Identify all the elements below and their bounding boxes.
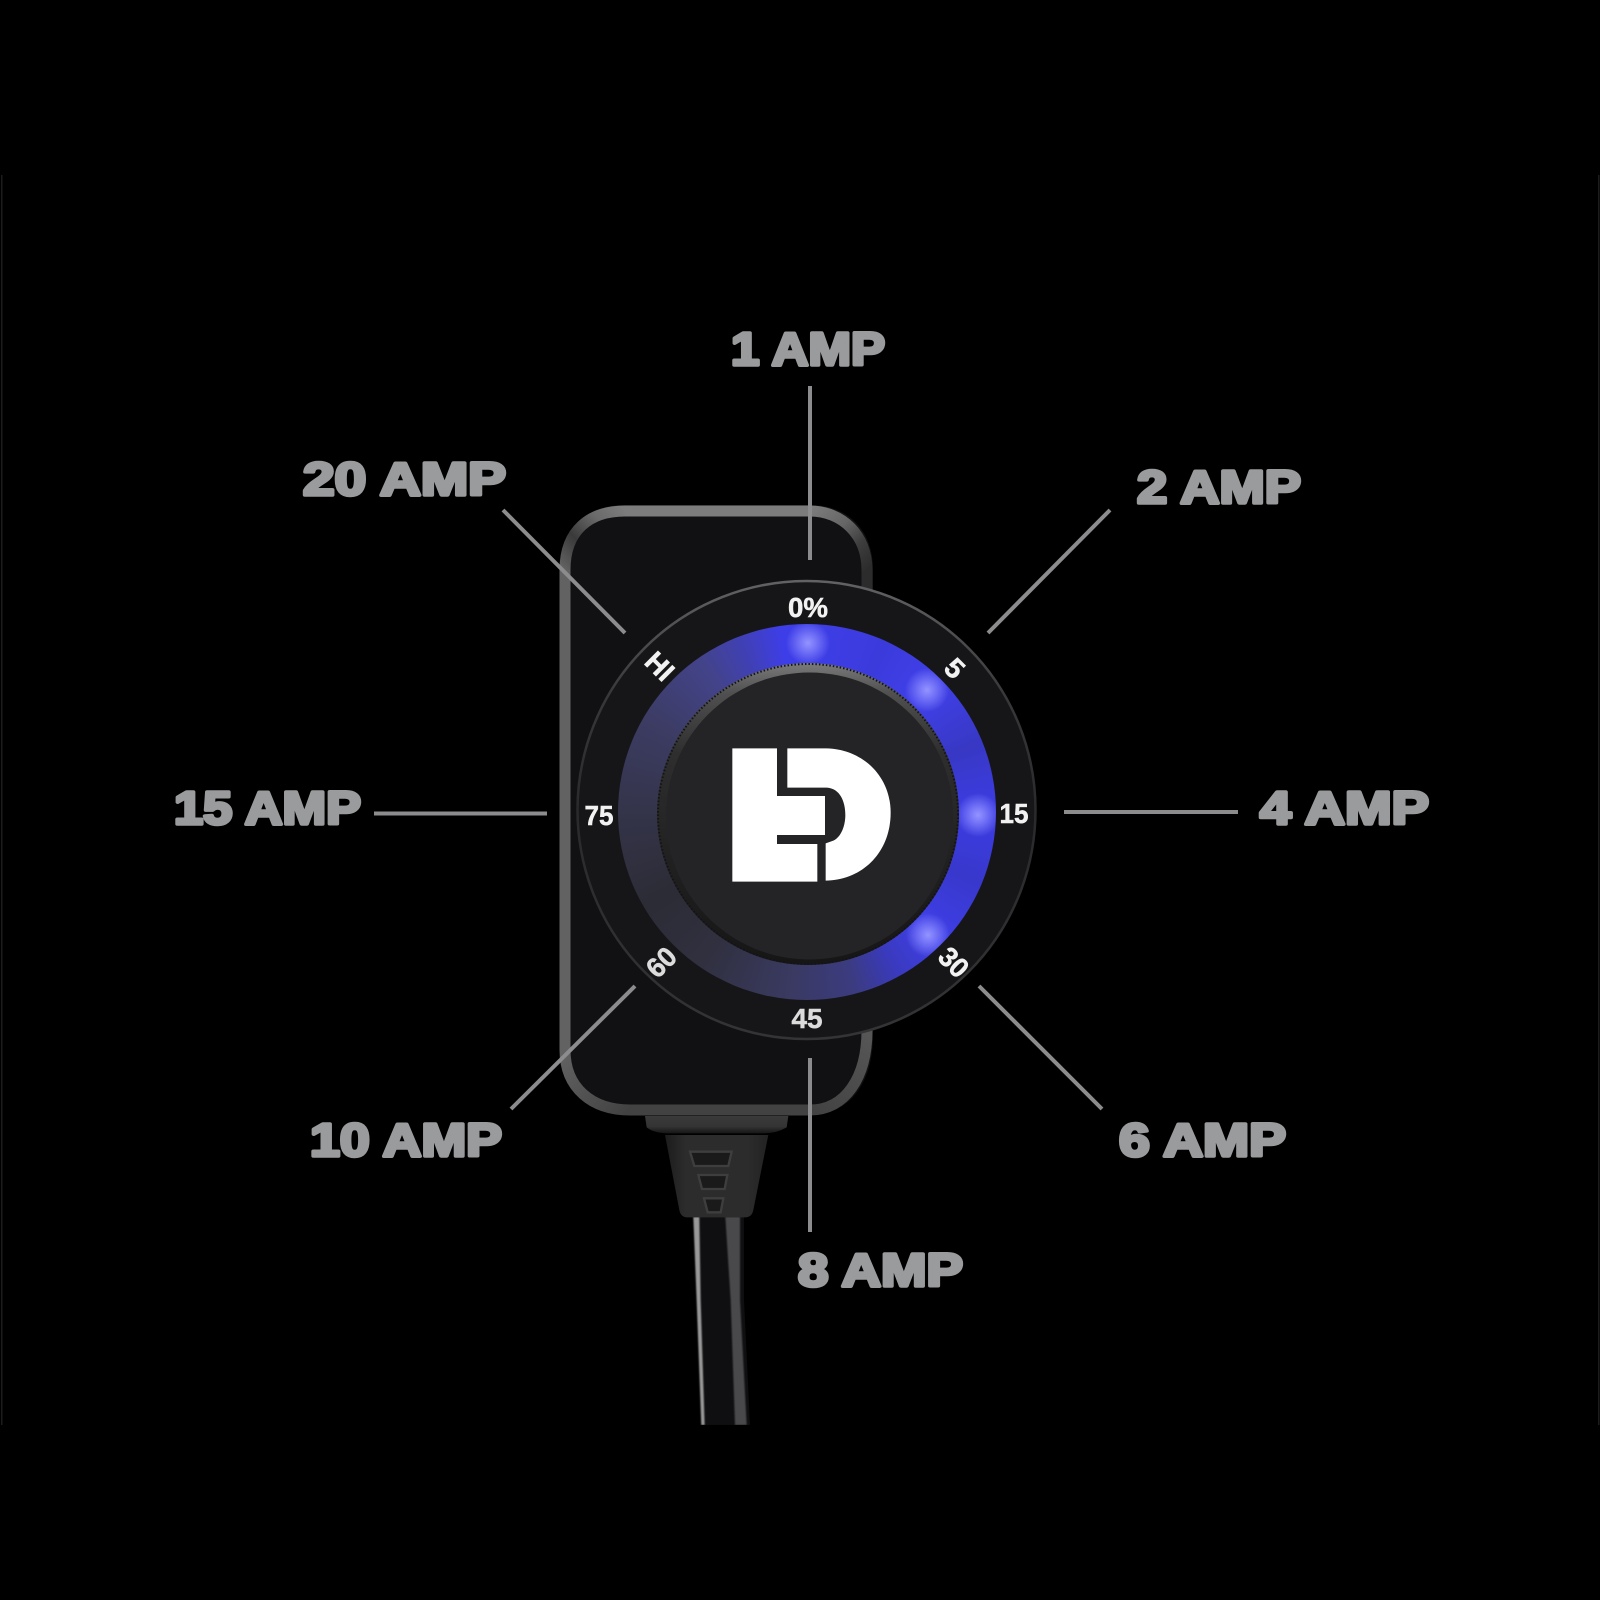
line: 10 amp	[511, 986, 635, 1109]
label: 8 amp: 8 AMP	[798, 1244, 963, 1296]
label: 6 amp: 6 AMP	[1119, 1114, 1286, 1166]
label: 2 amp: 2 AMP	[1137, 461, 1301, 513]
illuminated LED ring	[618, 624, 996, 1000]
dial outer disc	[578, 581, 1036, 1039]
mark: 45: 45	[792, 1003, 822, 1034]
label: 1 amp: 1 AMP	[731, 323, 885, 375]
frame edge lines	[1, 175, 1600, 1425]
line: 6 amp	[979, 986, 1102, 1109]
housing	[560, 505, 873, 1115]
label: 4 amp: 4 AMP	[1260, 782, 1429, 834]
mark: 75: 75	[584, 800, 614, 831]
label: 20 amp: 20 AMP	[303, 453, 506, 505]
strain relief	[645, 1116, 788, 1217]
label: 15 amp: 15 AMP	[174, 782, 361, 834]
knob	[657, 663, 959, 965]
mark: 15: 15	[1000, 798, 1028, 829]
logo	[732, 748, 891, 882]
line: 20 amp	[503, 510, 625, 633]
line: 2 amp	[988, 510, 1110, 633]
cable	[693, 1217, 753, 1428]
callout lines	[374, 386, 1238, 1232]
mark: 30: 30	[932, 941, 975, 984]
callout labels	[174, 323, 1429, 1296]
mark: HI: HI	[639, 645, 681, 687]
mark: 5: 5	[938, 652, 971, 685]
line: 4 amp	[1064, 810, 1238, 814]
mark: 0%: 0%	[788, 592, 828, 623]
label: 10 amp: 10 AMP	[310, 1114, 502, 1166]
line: 1 amp	[808, 386, 812, 560]
mark: 60: 60	[640, 941, 683, 984]
line: 15 amp	[374, 812, 547, 816]
line: 8 amp	[808, 1058, 812, 1232]
dial scale markings	[584, 592, 1028, 1034]
